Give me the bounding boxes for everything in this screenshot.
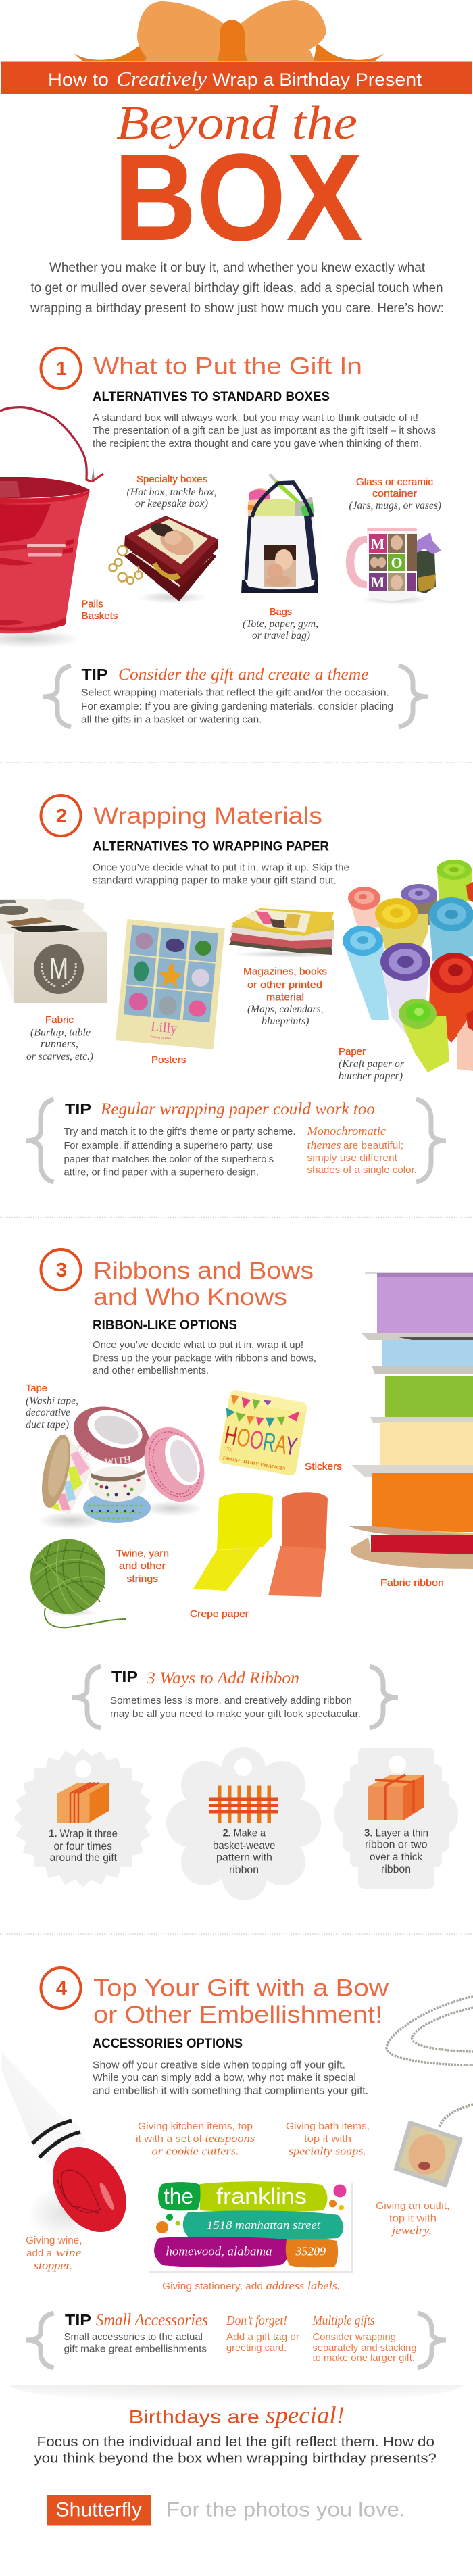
tip 2: Try and match it to the gift’s theme or party scheme. xyxy=(64,1126,296,1137)
label: kitchen items: it with a set of xyxy=(136,2133,203,2145)
photo: keepsake box xyxy=(109,516,218,603)
photo: tote bag xyxy=(241,474,318,593)
tip 1: For example: If you are giving gardening materials, consider placing xyxy=(81,701,393,712)
photo: hooray sticker: TO: xyxy=(224,1446,233,1453)
gift tag 1: around the gift xyxy=(50,1852,118,1864)
tip 1: TIP xyxy=(81,666,108,683)
main title: Beyond the: Beyond the xyxy=(116,97,357,149)
label: fabric: runners, xyxy=(41,1038,78,1050)
section 4 body xyxy=(93,2060,368,2096)
section 4 header xyxy=(41,1968,389,2028)
section 4 subheading: ACCESSORIES OPTIONS xyxy=(93,2037,243,2051)
section 2 header: 2 xyxy=(56,806,67,827)
intro text xyxy=(30,261,444,316)
label: wine stopper: Giving wine, xyxy=(26,2235,82,2246)
label: bags: or travel bag) xyxy=(252,630,310,641)
section 2 body: standard wrapping paper to make your gift stand out. xyxy=(93,874,337,887)
photo: photo pendant xyxy=(393,2104,473,2188)
label: magazines: or other printed xyxy=(247,979,322,991)
label: wine stopper xyxy=(26,2235,82,2272)
photo: hooray sticker xyxy=(216,1389,308,1476)
tip 1 xyxy=(43,666,428,727)
tip 1: Select wrapping materials that reflect the gift and/or the occasion. xyxy=(81,687,389,699)
label: kitchen items: teaspoons xyxy=(205,2132,255,2145)
tip 2: are beautiful; xyxy=(343,1140,403,1151)
label: fabric xyxy=(26,1014,93,1062)
label: outfit xyxy=(376,2200,450,2237)
label: fabric ribbon: Fabric ribbon xyxy=(380,1577,444,1589)
section 1 body xyxy=(93,412,436,449)
main title: BOX: BOX xyxy=(114,128,363,266)
photo: address label card xyxy=(147,2177,353,2273)
label: magazines: material xyxy=(266,992,304,1003)
tip 4: TIP xyxy=(65,2311,91,2329)
photo: washi tape rolls: WITH xyxy=(104,1455,132,1468)
section 2 body: Once you’ve decide what to put it in, wrap it up. Skip the xyxy=(93,862,349,873)
gift tag 2: 2. Make a xyxy=(223,1827,266,1839)
photo: paper rolls xyxy=(343,860,473,1072)
label: glass or ceramic container: Glass or ceramic xyxy=(356,476,433,488)
section 1 body: the recipient the extra thought and care you gave when thinking of them. xyxy=(93,438,422,449)
tip 2: Monochromatic xyxy=(306,1124,386,1137)
label: paper: butcher paper) xyxy=(339,1070,403,1082)
intro text: Whether you make it or buy it, and whether you knew exactly what xyxy=(49,261,426,275)
tip 4: separately and stacking xyxy=(312,2342,416,2354)
section 3 body xyxy=(93,1339,316,1377)
photo: washi tape rolls xyxy=(36,1397,215,1529)
photo: MOM mug: M xyxy=(371,574,385,591)
label: paper: Paper xyxy=(339,1046,366,1058)
photo: ribbon spools xyxy=(349,1272,473,1569)
photo: washi tape rolls: ADE xyxy=(71,1442,93,1462)
closing heading: special! xyxy=(266,2402,345,2429)
section 4 header: Top Your Gift with a Bow xyxy=(93,1975,389,2002)
label: stickers: Stickers xyxy=(305,1461,342,1472)
photo: address label card: franklins xyxy=(216,2184,307,2208)
label: bags xyxy=(243,606,318,641)
gift tag 3: over a thick xyxy=(370,1852,422,1863)
section 2 header: Wrapping Materials xyxy=(93,803,322,829)
label: magazines: Magazines, books xyxy=(243,966,327,977)
label: bath items: Giving bath items, xyxy=(286,2121,370,2132)
label: glass or ceramic container xyxy=(349,476,441,512)
section 1 body: The presentation of a gift can be just as important as the gift itself – it shows xyxy=(93,425,436,437)
label: magazines: blueprints) xyxy=(262,1016,309,1027)
label: stationery: Giving stationery, add xyxy=(162,2281,263,2292)
gift tag 1: or four times xyxy=(54,1841,112,1852)
section 1 header xyxy=(41,348,362,389)
section 3 header xyxy=(41,1249,314,1310)
section 4 body: Show off your creative side when topping off your gift. xyxy=(93,2060,345,2071)
label: tape: (Washi tape, xyxy=(26,1395,78,1407)
label: bath items: specialty soaps. xyxy=(289,2145,366,2157)
gift tag 2: pattern with xyxy=(216,1852,272,1864)
photo: magazines stack xyxy=(229,908,334,958)
label: twine xyxy=(116,1547,169,1585)
title banner xyxy=(1,62,472,94)
photo: necklace chain xyxy=(387,1996,473,2065)
photo: wine stopper xyxy=(1,2052,141,2246)
label: posters: Posters xyxy=(151,1054,186,1066)
gift tag 2: ribbon xyxy=(229,1864,259,1876)
tip 3: may be all you need to make your gift look spectacular. xyxy=(110,1708,361,1720)
photo: address label card: 35209 xyxy=(295,2245,326,2258)
label: twine: Twine, yarn xyxy=(116,1547,169,1560)
label: wine stopper: stopper. xyxy=(34,2259,72,2272)
tagline: For the photos you love. xyxy=(166,2499,405,2521)
photo: poster: Lilly xyxy=(150,1019,178,1037)
tip 3 xyxy=(72,1666,398,1728)
label: crepe paper: Crepe paper xyxy=(190,1608,249,1620)
tip 4: gift make great embellishments xyxy=(64,2344,207,2354)
label: specialty boxes: or keepsake box) xyxy=(135,498,208,510)
tip 4: Consider wrapping xyxy=(312,2331,396,2343)
label: tape: Tape xyxy=(26,1383,47,1394)
tip 2: simply use different xyxy=(307,1152,398,1164)
section 4 header: 4 xyxy=(56,1978,67,2000)
label: tape xyxy=(26,1383,78,1431)
gift tag 3 xyxy=(334,1748,458,1889)
gift tag 3: 3. Layer a thin xyxy=(364,1827,428,1839)
section 2 subheading: ALTERNATIVES TO WRAPPING PAPER xyxy=(93,839,329,854)
photo: MOM mug: M xyxy=(371,535,385,552)
label: pails and baskets: Pails xyxy=(81,599,103,610)
photo: address label card: the xyxy=(164,2184,193,2208)
section 4 body: and embellish it with something that compliments your gift. xyxy=(93,2085,368,2096)
section 4 body: While you can simply add a bow, why not make it special xyxy=(93,2072,356,2083)
label: specialty boxes: (Hat box, tackle box, xyxy=(127,487,216,498)
title banner: Wrap a Birthday Present xyxy=(212,70,422,90)
label: wine stopper: wine xyxy=(56,2246,82,2259)
label: kitchen items: Giving kitchen items, top xyxy=(138,2121,253,2132)
closing heading xyxy=(128,2402,345,2429)
tip 2: themes xyxy=(307,1139,341,1151)
tip 2: paper that matches the color of the superhero’s xyxy=(64,1154,274,1165)
section 1 header: What to Put the Gift In xyxy=(93,353,362,380)
section 1 subheading: ALTERNATIVES TO STANDARD BOXES xyxy=(93,390,330,404)
photo: MOM mug: O xyxy=(391,554,403,571)
section 1 body: A standard box will always work, but you may want to think outside of it! xyxy=(93,412,418,424)
label: glass or ceramic container: (Jars, mugs, or vases) xyxy=(349,500,441,512)
section 3 body: and other embellishments. xyxy=(93,1365,209,1377)
tip 2: For example, if attending a superhero party, use xyxy=(64,1140,273,1151)
gift tag 1 xyxy=(14,1748,153,1887)
photo: red pail xyxy=(0,407,103,648)
photo: hooray sticker: FROM: RUBY FRANCIS xyxy=(222,1456,286,1472)
section 3 body: Dress up the your package with ribbons and bows, xyxy=(93,1353,316,1364)
label: paper: (Kraft paper or xyxy=(339,1058,405,1070)
tip 3: 3 Ways to Add Ribbon xyxy=(146,1669,299,1687)
tip 4: to make one larger gift. xyxy=(312,2352,415,2364)
gift tag 2: basket-weave xyxy=(213,1840,276,1852)
section 3 header: and Who Knows xyxy=(93,1284,287,1310)
Shutterfly logo xyxy=(47,2495,151,2526)
label: kitchen items: or cookie cutters. xyxy=(151,2145,239,2157)
photo: yarn ball xyxy=(30,1539,126,1627)
label: tape: duct tape) xyxy=(26,1419,69,1431)
bow xyxy=(74,0,384,61)
title banner: How to xyxy=(48,70,109,90)
label: stationery: address labels. xyxy=(266,2279,341,2292)
label: tape: decorative xyxy=(26,1407,70,1418)
label: magazines: (Maps, calendars, xyxy=(247,1004,323,1015)
intro text: wrapping a birthday present to show just how much you care. Here’s how: xyxy=(30,301,444,316)
photo: table runner xyxy=(0,899,107,1003)
intro text: to get or mulled over several birthday gift ideas, add a special touch when xyxy=(31,281,443,295)
section 2 header xyxy=(41,795,322,836)
Shutterfly logo: Shutterfly xyxy=(55,2499,142,2521)
section 3 header: Ribbons and Bows xyxy=(93,1258,314,1284)
tip 4: Don’t forget! xyxy=(226,2313,287,2328)
label: fabric: Fabric xyxy=(45,1014,74,1026)
tip 2 xyxy=(26,1099,446,1182)
section 3 header: 3 xyxy=(56,1260,67,1281)
label: bath items: top it with xyxy=(304,2133,351,2145)
closing heading: Birthdays are xyxy=(128,2407,259,2427)
label: pails and baskets: Baskets xyxy=(81,610,118,622)
photo: hooray sticker: HOORAY xyxy=(222,1421,299,1462)
tip 2: attire, or find paper with a superhero design. xyxy=(64,1166,259,1179)
photo: crepe paper xyxy=(193,1492,328,1597)
title banner: Creatively xyxy=(116,67,207,91)
section 4 header: or Other Embellishment! xyxy=(93,2002,382,2028)
closing text: you think beyond the box when wrapping birthday presents? xyxy=(34,2452,437,2467)
section 3 subheading: RIBBON-LIKE OPTIONS xyxy=(93,1318,237,1333)
closing text xyxy=(34,2435,437,2467)
tip 2: TIP xyxy=(65,1100,91,1118)
tip 2: Regular wrapping paper could work too xyxy=(100,1100,375,1118)
label: bags: Bags xyxy=(270,606,292,618)
photo: table runner: M xyxy=(49,951,68,986)
label: glass or ceramic container: container xyxy=(372,488,417,499)
photo: address label card: 1518 manhattan street xyxy=(207,2219,321,2231)
section 3 body: Once you’ve decide what to put it in, wrap it up! xyxy=(93,1339,303,1351)
label: outfit: Giving an outfit, xyxy=(376,2200,450,2212)
gift tag 3: ribbon or two xyxy=(365,1839,427,1850)
photo: poster xyxy=(116,919,225,1049)
tip 1: all the gifts in a basket or watering can. xyxy=(81,714,262,726)
label: wine stopper: add a xyxy=(26,2248,53,2259)
section 2 body xyxy=(93,862,349,887)
tip 3: Sometimes less is more, and creatively adding ribbon xyxy=(110,1695,352,1706)
label: specialty boxes: Specialty boxes xyxy=(136,474,207,485)
label: fabric: or scarves, etc.) xyxy=(26,1051,93,1062)
gift tag 3: ribbon xyxy=(381,1864,411,1875)
tip 3: TIP xyxy=(111,1668,138,1685)
tip 1: Consider the gift and create a theme xyxy=(118,666,369,684)
photo: address label card: homewood, alabama xyxy=(166,2245,272,2258)
photo: MOM mug xyxy=(346,528,441,605)
photo: poster: To swing by when xyxy=(150,1035,172,1040)
tip 4: Small Accessories xyxy=(96,2311,208,2329)
label: paper xyxy=(339,1046,405,1082)
section 1 header: 1 xyxy=(56,358,67,380)
gift tag 1: 1. Wrap it three xyxy=(49,1829,118,1839)
tip 4: Add a gift tag or xyxy=(226,2331,299,2343)
label: magazines xyxy=(243,966,327,1027)
tip 4: Small accessories to the actual xyxy=(64,2331,203,2343)
tip 4: Multiple gifts xyxy=(312,2313,375,2328)
label: twine: strings xyxy=(127,1573,158,1585)
tip 2: shades of a single color. xyxy=(307,1164,417,1176)
label: twine: and other xyxy=(119,1560,166,1572)
label: bags: (Tote, paper, gym, xyxy=(243,618,318,630)
closing text: Focus on the individual and let the gift reflect them. How do xyxy=(36,2435,434,2450)
tip 4: greeting card. xyxy=(226,2342,287,2354)
label: specialty boxes xyxy=(127,474,216,510)
label: bath items xyxy=(286,2121,370,2157)
label: outfit: jewelry. xyxy=(391,2224,432,2237)
label: kitchen items xyxy=(136,2121,255,2157)
label: pails and baskets xyxy=(81,599,118,622)
label: fabric: (Burlap, table xyxy=(30,1027,91,1038)
tip 4 xyxy=(26,2311,446,2368)
gift tag 2 xyxy=(166,1747,321,1900)
label: outfit: top it with xyxy=(389,2212,437,2225)
label: stationery xyxy=(162,2279,341,2292)
